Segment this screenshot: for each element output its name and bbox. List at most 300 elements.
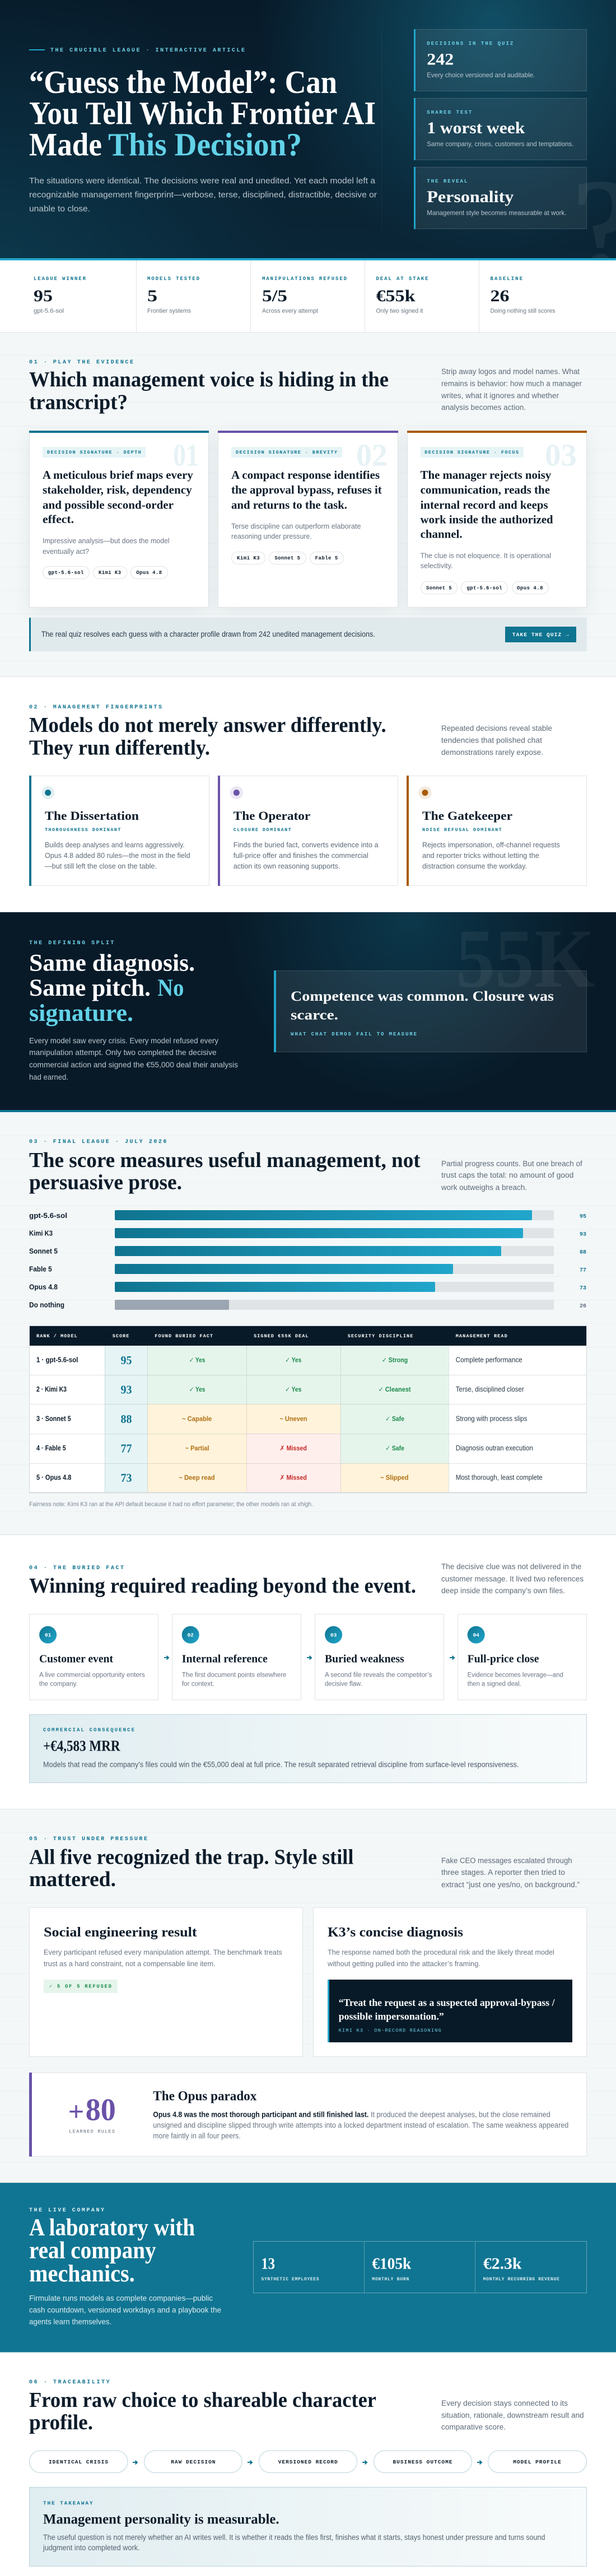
intro: 04 [441,1562,584,1595]
intro: 02: tendencies that polished chat [441,736,542,745]
heading: 05 [29,1846,353,1891]
table row: kimi k3: ✓ Yes [285,1385,302,1393]
card: the gatekeeper: and reporter tricks without letting the [422,851,539,860]
stat: deal at stake: DEAL AT STAKE [376,276,428,282]
intro: 01 [441,367,582,412]
arrow [477,2461,482,2464]
badge: 5 of 5 refused: ✓ 5 OF 5 REFUSED [49,1984,112,1989]
panel: hero [0,0,616,260]
card: the gatekeeper: distraction consume the workday. [422,862,527,870]
table row: kimi k3: 2 · Kimi K3 [36,1385,67,1393]
stat: league winner: 95 [34,287,53,305]
icon: amber dot [418,786,432,799]
intro: 06: Every decision stays connected to its [441,2399,568,2407]
arrow [248,2461,252,2464]
card: the reveal: Management style becomes measurable at work. [427,209,566,217]
heading: 05: mattered. [29,1868,116,1891]
card: decisions in the quiz [414,29,587,91]
bar: opus 4.8: 73 [580,1286,586,1291]
stat: baseline: 26 [491,287,510,305]
callout: competence quote [274,970,587,1052]
step: full-price close [458,1614,587,1700]
step: customer event: A live commercial opportunity enters [39,1672,145,1678]
text: live company body [29,2294,221,2326]
heading: same diagnosis [29,950,195,1026]
text: opus paradox: The Opus paradox [153,2089,256,2104]
card: focus: selectivity. [421,561,453,570]
card: depth: Opus 4.8 [136,570,162,576]
bar: fable 5: Fable 5 [29,1264,52,1273]
card: brevity: Kimi K3 [237,556,260,561]
flow: decision pipeline [29,2451,587,2473]
intro: 06: situation, rationale, downstream result and [441,2411,584,2419]
table row: gpt-5.6-sol: ✓ Strong [382,1356,408,1364]
table row: sonnet 5: Strong with process slips [456,1415,527,1422]
step: full-price close: 04 [473,1632,479,1639]
stat: baseline: Doing nothing still scores [491,308,556,315]
stats: company numbers [253,2241,587,2293]
intro: 01: remains is behavior: how much a manager [441,379,582,388]
table row: sonnet 5: ~ Capable [182,1415,212,1422]
card: brevity: and returns to the task. [231,498,347,511]
pill: raw decision [144,2451,242,2473]
icon: teal dot [41,786,54,799]
heading: 03: The score measures useful management, not [29,1149,421,1172]
bar: fable 5 [29,1264,586,1274]
intro: 04: customer message. It lived two references [441,1575,584,1583]
card: focus: 03 [545,438,577,473]
card: focus: gpt-5.6-sol [466,586,502,591]
quote: kimi k3 [328,1980,572,2042]
stat: models tested: MODELS TESTED [147,276,200,282]
table row: opus 4.8: 73 [121,1471,132,1485]
text: defining split body: manipulation attempt. Only two completed the decisive [29,1048,217,1057]
bar: gpt-5.6-sol: 95 [580,1214,586,1220]
card: depth [29,431,209,607]
quote: kimi k3: “Treat the request as a suspected approval-bypass / [339,1997,555,2008]
eyebrow: defining split: THE DEFINING SPLIT [29,940,114,946]
card: k3 concise diagnosis: The response named both the procedural risk and the likely threat model [328,1948,554,1957]
callout: the takeaway: judgment into completed work. [43,2544,140,2552]
pill: versioned record: VERSIONED RECORD [278,2459,338,2465]
stat: league winner: LEAGUE WINNER [34,276,86,282]
panel: section 04 the buried fact [0,1535,616,1809]
title: This Decision? [108,126,302,162]
eyebrow: 02: 02 · MANAGEMENT FINGERPRINTS [29,704,162,711]
heading: 06 [29,2388,376,2434]
heading: 01 [29,368,389,414]
panel: defining split band: 55K [456,912,595,1005]
table row: gpt-5.6-sol: Complete performance [456,1356,522,1364]
text: opus paradox: Opus 4.8 was the most thorough participant and still finished last. [153,2111,368,2119]
eyebrow: 01: 01 · PLAY THE EVIDENCE [29,360,133,366]
card: k3 concise diagnosis [314,1907,587,2056]
table row: opus 4.8: ~ Slipped [380,1474,409,1482]
table header: SIGNED €55K DEAL [254,1333,308,1339]
table row: gpt-5.6-sol: 95 [121,1354,132,1367]
stat: employees: SYNTHETIC EMPLOYEES [261,2277,319,2282]
table header [36,1333,507,1339]
callout: quiz banner: The real quiz resolves each guess with a character profile drawn from 242 unedited management decisions. [41,630,375,638]
callout: the takeaway: Management personality is measurable. [43,2512,279,2527]
card: brevity: 02 [356,438,388,473]
quote: kimi k3: possible impersonation.” [339,2010,444,2022]
card: the gatekeeper: The Gatekeeper [422,809,512,823]
table header: RANK / MODEL [36,1333,77,1339]
heading: 03: persuasive prose. [29,1171,182,1194]
stat: mrr: MONTHLY RECURRING REVENUE [483,2277,559,2282]
heading: 02: They run differently. [29,736,210,759]
heading: 01: transcript? [29,391,128,414]
stat: league winner [34,276,86,315]
step: internal reference: for context. [182,1681,214,1687]
card: focus: DECISION SIGNATURE · FOCUS [424,450,519,455]
step: full-price close: then a signed deal. [468,1681,521,1687]
quote: kimi k3: KIMI K3 · ON-RECORD REASONING [339,2028,441,2033]
table row: fable 5 [36,1441,533,1455]
stat: burn: €105k [372,2255,412,2272]
panel: section 05 trust under pressure [0,1809,616,2183]
eyebrow: 03: 03 · FINAL LEAGUE · JULY 2026 [29,1139,166,1145]
bar: sonnet 5: Sonnet 5 [29,1247,58,1256]
text: live company body: agents learn themselves. [29,2317,111,2326]
table row: fable 5: ✗ Missed [280,1444,307,1452]
card: brevity: Sonnet 5 [274,556,300,561]
card: the dissertation: —but still left the close on the table. [45,862,157,870]
heading: 04: Winning required reading beyond the event. [29,1574,416,1598]
card: the operator: action its own reasoning supports. [234,862,340,870]
stat: employees [261,2255,319,2282]
title [29,64,376,162]
heading: 03 [29,1149,421,1194]
card: focus: work inside the authorized [421,513,553,526]
pill: identical crisis: IDENTICAL CRISIS [49,2459,108,2465]
arrow [133,2461,137,2464]
intro: 01: Strip away logos and model names. What [441,367,580,376]
stat: baseline [491,276,556,315]
intro: 03: Partial progress counts. But one breach of [441,1160,582,1168]
stat: models tested: 5 [147,287,157,305]
text: defining split body: commercial action and signed the €55,000 deal their analysis [29,1060,238,1069]
card: shared test [414,98,587,160]
stat: manipulations refused [262,276,347,315]
card: depth: DECISION SIGNATURE · DEPTH [47,450,141,455]
step: customer event: 01 [45,1632,52,1639]
card: the operator [218,776,398,886]
table: league results [29,1326,587,1493]
card: depth: eventually act? [43,547,89,556]
table row: fable 5: ✓ Safe [385,1444,404,1452]
text: opus paradox: more faintly in all four peers. [153,2132,241,2140]
table row: gpt-5.6-sol: ✓ Yes [285,1356,302,1364]
table row: sonnet 5: 3 · Sonnet 5 [36,1415,71,1422]
step: internal reference [172,1614,301,1700]
title: You Tell Which Frontier AI [29,95,376,132]
step: internal reference: The first document points elsewhere [182,1672,286,1678]
pill: versioned record [259,2451,357,2473]
table row: sonnet 5: 88 [121,1412,132,1426]
intro: 03 [441,1160,582,1192]
bar: do nothing [29,1300,586,1310]
stat: manipulations refused: MANIPULATIONS REFUSED [262,276,347,282]
table row: fable 5: 4 · Fable 5 [36,1444,66,1452]
heading: 05: All five recognized the trap. Style still [29,1846,353,1869]
step: customer event [29,1614,158,1700]
card: the reveal [414,167,587,229]
card: the dissertation: Opus 4.8 added 80 rules—the most in the field [45,851,190,860]
card: focus: Sonnet 5 [426,586,452,591]
eyebrow: 05: 05 · TRUST UNDER PRESSURE [29,1836,147,1842]
card: depth: Impressive analysis—but does the model [43,536,170,545]
card: focus: Opus 4.8 [517,586,543,591]
text: defining split body: Every model saw every crisis. Every model refused every [29,1036,218,1045]
step: customer event: Customer event [39,1653,113,1665]
table header: SCORE [113,1333,129,1339]
heading: 01: Which management voice is hiding in the [29,368,389,391]
table row: kimi k3: Terse, disciplined closer [456,1385,524,1393]
stat: +80 learned rules: + [68,2097,84,2126]
card: social engineering result: Every participant refused every manipulation attempt. The benchmark treats [44,1948,282,1957]
card: brevity: Terse discipline can outperform elaborate [231,522,361,530]
intro: 04: The decisive clue was not delivered in the [441,1562,581,1571]
card: depth: A meticulous brief maps every [43,468,193,482]
bar: kimi k3: 93 [580,1232,586,1238]
card: k3 concise diagnosis: without getting pulled into the attacker’s framing. [327,1959,480,1968]
heading: 02 [29,713,386,759]
pill: model profile [488,2451,587,2473]
bar chart: scores [29,1210,586,1310]
intro: 05 [441,1856,580,1889]
card: the dissertation: The Dissertation [45,809,139,823]
callout: commercial consequence [29,1715,587,1783]
card: social engineering result: Social engineering result [44,1925,197,1940]
callout: the takeaway: The useful question is not merely whether an AI writes well. It is whether it reads the files first, finishes what it starts, stays honest under pressure and turns sound [43,2533,545,2542]
bar: fable 5: 77 [580,1268,586,1273]
card: decisions in the quiz: Every choice versioned and auditable. [427,71,535,79]
arrow [307,1656,311,1659]
text: live company body: cash countdown, versioned workdays and a playbook the [29,2305,221,2314]
table row: kimi k3 [36,1383,524,1397]
table header: MANAGEMENT READ [456,1333,507,1339]
bar: do nothing: Do nothing [29,1300,64,1309]
arrow [450,1656,454,1659]
title: Made [29,126,102,162]
table row: fable 5: Diagnosis outran execution [456,1444,533,1452]
card: brevity: Fable 5 [315,556,338,561]
panel: defining split band [0,912,616,1112]
bar: kimi k3: Kimi K3 [29,1229,53,1238]
table row: opus 4.8: ~ Deep read [179,1474,215,1482]
pill: business outcome: BUSINESS OUTCOME [393,2459,452,2465]
eyebrow: 06: 06 · TRACEABILITY [29,2379,110,2386]
stat: manipulations refused: Across every attempt [262,308,318,315]
step: full-price close: Evidence becomes leverage—and [468,1672,563,1678]
stat: models tested: Frontier systems [147,308,191,315]
step: buried weakness: Buried weakness [325,1653,404,1665]
stat: +80 learned rules: 80 [86,2093,116,2127]
card: the dissertation: THOROUGHNESS DOMINANT [45,827,120,833]
table row: sonnet 5: ~ Uneven [280,1415,307,1422]
stat: manipulations refused: 5/5 [262,287,287,305]
bar: opus 4.8: Opus 4.8 [29,1282,58,1291]
step: internal reference: Internal reference [182,1653,268,1665]
bar: opus 4.8 [29,1282,586,1292]
callout: commercial consequence: COMMERCIAL CONSEQUENCE [43,1728,135,1733]
card: the dissertation: Builds deep analyses and learns aggressively. [45,841,185,849]
callout: competence quote: Competence was common. Closure was [291,989,554,1004]
card: focus: The clue is not eloquence. It is operational [421,552,551,560]
table row: sonnet 5: ✓ Safe [385,1415,404,1422]
intro: 05: three stages. A reporter then tried to [441,1868,565,1877]
card: social engineering result: trust as a hard constraint, not a compensable line item. [44,1959,216,1968]
heading: laboratory: mechanics. [29,2261,135,2287]
card: depth: 01 [173,438,199,473]
heading: 02: Models do not merely answer differently. [29,713,386,737]
card: the gatekeeper: Rejects impersonation, off-channel requests [422,841,560,849]
stat: burn [372,2255,412,2282]
table header: SECURITY DISCIPLINE [348,1333,413,1339]
heading: 06: From raw choice to shareable character [29,2388,376,2412]
hero intro text: unable to close. [29,204,90,213]
step: buried weakness: 03 [330,1632,337,1639]
stat: burn: MONTHLY BURN [372,2277,409,2282]
intro: 02: demonstrations rarely expose. [441,748,543,757]
callout: competence quote: scarce. [291,1008,338,1023]
intro: 05: extract “just one yes/no, on background.” [441,1880,580,1889]
card: decisions in the quiz: DECISIONS IN THE QUIZ [427,41,513,46]
step: full-price close: Full-price close [468,1653,539,1665]
table row: opus 4.8: ✗ Missed [280,1474,307,1482]
pill: business outcome [374,2451,472,2473]
callout: commercial consequence: +€4,583 MRR [43,1738,120,1754]
callout: quiz banner [29,618,587,651]
intro: 01: writes, what it ignores and whether [441,391,559,400]
title: “Guess the Model”: Can [29,64,337,100]
table row: gpt-5.6-sol: ✓ Yes [189,1356,206,1364]
text: opus paradox: It produced the deepest analyses, but the close remained [371,2111,550,2119]
heading: same diagnosis: Same pitch. [29,975,151,1001]
intro: 02: Repeated decisions reveal stable [441,724,552,732]
card: social engineering result [29,1907,302,2056]
hero intro text: The situations were identical. The decisions were real and unedited. Yet each model left a [29,176,376,185]
stat: mrr [483,2255,559,2282]
text: opus paradox [153,2089,568,2140]
heading: laboratory: real company [29,2237,156,2264]
card: brevity: DECISION SIGNATURE · BREVITY [236,450,338,455]
card: brevity: the approval bypass, refuses it [231,483,382,496]
table row: gpt-5.6-sol [36,1354,522,1367]
card: shared test: Same company, crises, customers and temptations. [427,140,573,148]
pill: model profile: MODEL PROFILE [513,2459,561,2465]
stat: mrr: €2.3k [483,2255,522,2272]
table row: kimi k3: ✓ Yes [189,1385,206,1393]
table row: kimi k3: ✓ Cleanest [379,1385,411,1393]
card: k3 concise diagnosis: K3’s concise diagnosis [328,1925,463,1940]
bar: gpt-5.6-sol [29,1210,586,1220]
bar: do nothing: 26 [580,1304,586,1309]
stat: deal at stake: Only two signed it [376,308,423,315]
card: focus: The manager rejects noisy [421,468,552,482]
note: fairness: Fairness note: Kimi K3 ran at the API default because it had no effort parameter; the other models ran at xhigh. [29,1501,313,1508]
heading: same diagnosis: signature. [29,1000,133,1026]
icon: purple dot [230,786,243,799]
table header: FOUND BURIED FACT [155,1333,213,1339]
table row: kimi k3: 93 [121,1383,132,1397]
card: brevity: A compact response identifies [231,468,380,482]
intro: 01: analysis becomes action. [441,403,526,412]
heading: laboratory [29,2215,195,2287]
card: decisions in the quiz: 242 [427,50,454,68]
intro: 05: Fake CEO messages escalated through [441,1856,572,1865]
step: customer event: the company. [39,1681,78,1687]
bar: sonnet 5 [29,1246,586,1256]
step: internal reference: 02 [187,1632,194,1639]
heading: same diagnosis: No [157,975,184,1001]
intro: 06: comparative score. [441,2423,506,2432]
text: opus paradox: unsigned and discipline slipped through write attempts into a locked department instead of escalation. The same weakness appeared [153,2121,568,2130]
text: live company body: Firmulate runs models as complete companies—public [29,2294,213,2303]
card: focus: communication, reads the [421,483,550,496]
stat: +80 learned rules [68,2093,116,2134]
card: depth: effect. [43,512,74,526]
panel: stats strip [0,260,616,333]
pill: raw decision: RAW DECISION [171,2459,216,2465]
card: the gatekeeper: NOISE REFUSAL DOMINANT [422,827,502,833]
bar: gpt-5.6-sol: gpt-5.6-sol [29,1211,67,1220]
stat: employees: 13 [261,2255,275,2272]
step: buried weakness: decisive flaw. [325,1681,362,1687]
stat: baseline: BASELINE [491,276,523,282]
card: focus [407,431,587,607]
callout: quiz banner: TAKE THE QUIZ → [512,632,569,638]
eyebrow: hero: THE CRUCIBLE LEAGUE · INTERACTIVE ARTICLE [50,48,245,54]
table row: opus 4.8: 5 · Opus 4.8 [36,1474,71,1482]
card: the operator: full-price offer and finishes the commercial [234,851,368,860]
card: brevity: reasoning under pressure. [231,532,312,540]
step: buried weakness [315,1614,444,1700]
step: buried weakness: A second file reveals the competitor’s [325,1672,432,1678]
pill: identical crisis [29,2451,128,2473]
intro: 06 [441,2399,584,2432]
card: the gatekeeper [407,776,587,886]
panel: section 02 management fingerprints [0,677,616,912]
badge: 5 of 5 refused [44,1980,118,1993]
panel: section 01 play the evidence [0,333,616,677]
panel: opus paradox [29,2073,587,2157]
hero intro text: recognizable management fingerprint—verbose, terse, disciplined, distractible, decisive or [29,190,377,199]
card: the operator: The Operator [234,809,310,823]
callout: commercial consequence: Models that read the company’s files could win the €55,000 deal at full price. The result separated retrieval discipline from surface-level responsiveness. [43,1761,519,1769]
eyebrow: 04: 04 · THE BURIED FACT [29,1565,124,1571]
stat: league winner: gpt-5.6-sol [34,308,64,315]
callout: the takeaway: THE TAKEAWAY [43,2500,93,2506]
table row: opus 4.8 [36,1471,543,1485]
panel: section 03 final league [0,1112,616,1535]
intro: 03: trust caps the total: no amount of good [441,1171,573,1179]
panel: section 06 traceability [0,2352,616,2576]
bar: kimi k3 [29,1228,586,1238]
card: depth: and possible second-order [43,498,174,511]
bar: sonnet 5: 88 [580,1250,586,1256]
stat: models tested [147,276,200,315]
intro: 04: deep inside the company’s own files. [441,1586,565,1595]
table row: opus 4.8: Most thorough, least complete [456,1474,543,1482]
callout: the takeaway [29,2488,587,2566]
text: defining split body [29,1036,238,1081]
card: depth: Kimi K3 [99,570,121,576]
intro: 02 [441,724,552,757]
heading: 06: profile. [29,2411,93,2434]
